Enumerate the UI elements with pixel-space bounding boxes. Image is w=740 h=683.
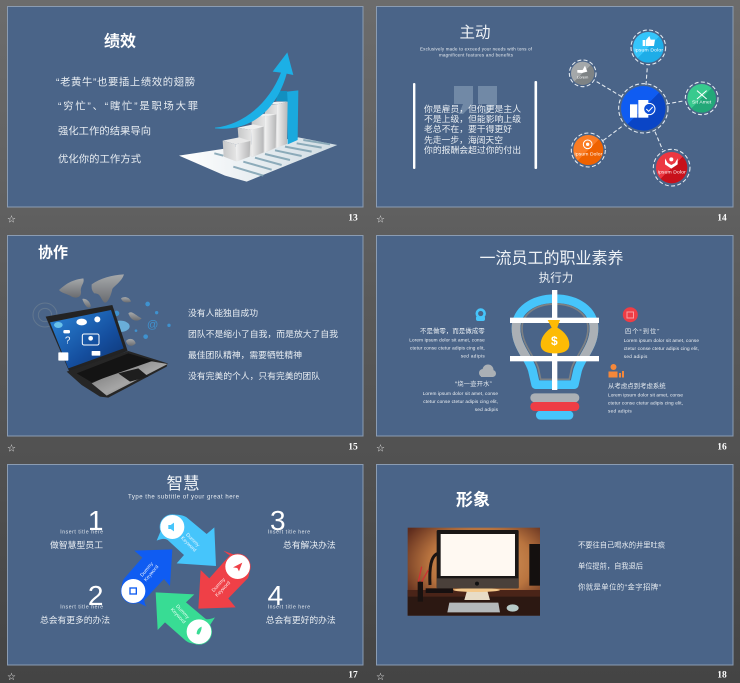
icon: head: [476, 308, 486, 321]
icon: star footer: ☆: [7, 444, 16, 454]
node: gray lorem: [569, 60, 596, 87]
item 3: 总有解决办法: [283, 539, 336, 550]
image: laptop with world map: [33, 274, 171, 398]
arrow: dark blue: Dummy: [139, 561, 155, 578]
node: orange: Ipsum Dolor: [574, 151, 603, 157]
image: laptop with world map: ?: [65, 335, 71, 346]
left item 1: Lorem ipsum dolor sit amet, conse: [409, 338, 485, 342]
panel: slide 15 collaboration: [7, 236, 363, 454]
heading: 绩效: 绩效: [104, 32, 136, 50]
item 1: 做智慧型员工: [50, 539, 103, 550]
icon: quotation mark: [454, 86, 497, 114]
right item 2: [608, 364, 683, 414]
item 4: 总会有更好的办法: [266, 614, 336, 625]
left item 2: ctetur conse ctetur adipis cing elit,: [423, 399, 498, 404]
item 3: [268, 505, 336, 550]
money bag: $: [551, 334, 558, 348]
icon: star footer: ☆: [7, 214, 16, 226]
node: gray lorem: Lorem: [577, 74, 589, 79]
photo: desktop computer on desk: [408, 528, 540, 616]
text block: teamwork points: [188, 307, 338, 381]
node: central building: [619, 84, 668, 133]
item 4: Insert title here: [268, 605, 310, 611]
right item 2: Lorem ipsum dolor sit amet, conse: [608, 392, 683, 398]
text block: image points: 你就是单位的“金字招牌”: [578, 582, 662, 592]
right item 2: 从考虑点到考虑系统: [608, 381, 666, 390]
right item 1: ctetur conse ctetur adipis cing elit,: [624, 346, 699, 351]
icon: star footer: ☆: [376, 672, 385, 683]
page number 16: 16: [717, 442, 727, 452]
panel: slide 13 performance: [7, 6, 363, 226]
text block: performance points: “穷忙”、“瞎忙”是职场大罪: [58, 100, 198, 112]
icon: cloud: [479, 364, 496, 377]
text block: teamwork points: 没有人能独自成功: [188, 307, 258, 318]
arrow: green: Keyword: [169, 607, 187, 625]
node: red hands: [653, 149, 690, 186]
node: red hands: Ipsum Dolor: [658, 169, 686, 175]
right item 2: sed adipis: [608, 408, 632, 414]
node: top thumbs up: Ipsum Dolor: [634, 47, 663, 53]
diagram: four cycling arrows: [121, 515, 250, 644]
panel: slide 16 professional qualities: [376, 236, 733, 454]
arrow: red: Keyword: [214, 580, 232, 599]
text block: quote: [424, 103, 521, 155]
right item 1: Lorem ipsum dolor sit amet, conse: [624, 338, 699, 343]
arrow: green: Dummy: [174, 604, 191, 621]
text block: image points: [578, 540, 666, 592]
subheading: 执行力: 执行力: [539, 270, 573, 284]
window cross bars: [510, 290, 599, 390]
left item 2: sed adipis: [475, 407, 499, 412]
icon: person with chart: [608, 364, 624, 378]
left item 2: Lorem ipsum dolor sit amet, conse: [423, 391, 498, 396]
text block: performance points: 优化你的工作方式: [58, 152, 141, 166]
subtitle text: [420, 46, 533, 58]
right item 1: 四个“到位”: [625, 328, 659, 336]
arrow: red: Dummy: [211, 577, 227, 594]
heading: main title: 一流员工的职业素养: [479, 250, 624, 268]
node: green sit amet: Sit Amet: [692, 100, 712, 106]
subtitle text: magnificent features and benefits: [439, 52, 514, 58]
text block: teamwork points: 最佳团队精神，需要牺牲精神: [188, 349, 302, 360]
node: orange: [571, 133, 605, 167]
node: top thumbs up: [631, 30, 666, 65]
heading: 智慧: 智慧: [166, 474, 200, 493]
icon: star footer: ☆: [376, 214, 385, 226]
item 2: 总会有更多的办法: [40, 614, 110, 625]
left item 2: “烧一壶开水”: [455, 380, 492, 388]
right item 2: ctetur conse ctetur adipis cing elit,: [608, 400, 683, 406]
arrow: light blue: [157, 515, 216, 566]
panel: slide 18 image: [376, 464, 733, 683]
laptop base: [67, 351, 168, 398]
left item 1: [409, 308, 486, 358]
text block: quote: 先走一步，海阔天空: [424, 134, 503, 145]
page number 17: 17: [348, 670, 358, 680]
left item 1: ctetur conse ctetur adipis cing elit,: [410, 346, 485, 350]
right item 1: sed adipis: [624, 354, 648, 359]
world map: [59, 274, 142, 346]
left item 2: [423, 364, 499, 412]
text block: quote: 不是上级，但能影响上级: [424, 113, 521, 124]
item 3: Insert title here: [268, 530, 310, 536]
arrow: dark blue: [121, 549, 172, 607]
left bracket: [413, 83, 415, 169]
subtitle text: Exclusively made to exceed your needs with tons of: [420, 46, 533, 52]
arrow: red: [198, 551, 250, 609]
icon: star footer: ☆: [376, 444, 385, 454]
text block: quote: 你是雇员，但你更是主人: [424, 103, 521, 114]
text block: teamwork points: 没有完美的个人，只有完美的团队: [188, 370, 320, 381]
page number 18: 18: [717, 670, 727, 680]
text block: quote: 老总不在，要干得更好: [424, 123, 512, 134]
item 1: 1: [88, 505, 104, 536]
diagram: hub and spokes: [569, 30, 718, 186]
text block: performance points: 强化工作的结果导向: [58, 124, 151, 138]
heading: 协作: 协作: [38, 244, 68, 262]
illustration: light bulb with money bag: [510, 290, 599, 420]
chart: rising 3D bars with arrow: [179, 52, 337, 182]
panel: slide 17 wisdom: [7, 464, 363, 683]
item 1: Insert title here: [60, 530, 103, 536]
item 1: [50, 505, 104, 550]
node: green sit amet: [685, 82, 718, 115]
item 2: 2: [88, 580, 104, 611]
laptop lid: [46, 305, 128, 373]
page number 13: 13: [348, 214, 358, 224]
arrow: green: [156, 592, 215, 644]
right item 1: [623, 307, 699, 359]
page number 14: 14: [717, 214, 727, 224]
left item 1: sed adipis: [461, 354, 485, 358]
item 2: Insert title here: [60, 605, 103, 611]
text block: performance points: [56, 76, 198, 166]
floating icons: [114, 302, 171, 339]
heading: 形象: 形象: [456, 490, 490, 510]
arrow: light blue: Keyword: [179, 535, 197, 554]
item 4: [266, 580, 336, 625]
page number 15: 15: [348, 442, 358, 452]
icon: red badge: [623, 307, 638, 322]
panel: slide 14 initiative: [376, 6, 733, 226]
right bracket: [534, 81, 537, 169]
item 4: 4: [268, 580, 283, 611]
arrow: dark blue: Keyword: [143, 564, 160, 583]
text block: teamwork points: 团队不是缩小了自我，而是放大了自我: [188, 328, 338, 339]
text block: image points: 单位提前，自我退后: [578, 562, 643, 570]
item 2: [40, 580, 110, 625]
subtitle: Type the subtitle of your great here: [128, 494, 240, 500]
arrow: light blue: Dummy: [184, 532, 201, 549]
left item 1: 不是做零，而是做成零: [420, 326, 485, 335]
item 3: 3: [270, 505, 286, 536]
text block: quote: 你的报酬会超过你的付出: [424, 144, 521, 155]
icon: star footer: ☆: [7, 672, 16, 683]
text block: performance points: “老黄牛”也要插上绩效的翅膀: [56, 76, 195, 88]
text block: image points: 不要往自己喝水的井里吐痰: [578, 540, 666, 550]
image: laptop with world map: @: [147, 319, 158, 331]
heading: 主动: 主动: [459, 24, 491, 42]
